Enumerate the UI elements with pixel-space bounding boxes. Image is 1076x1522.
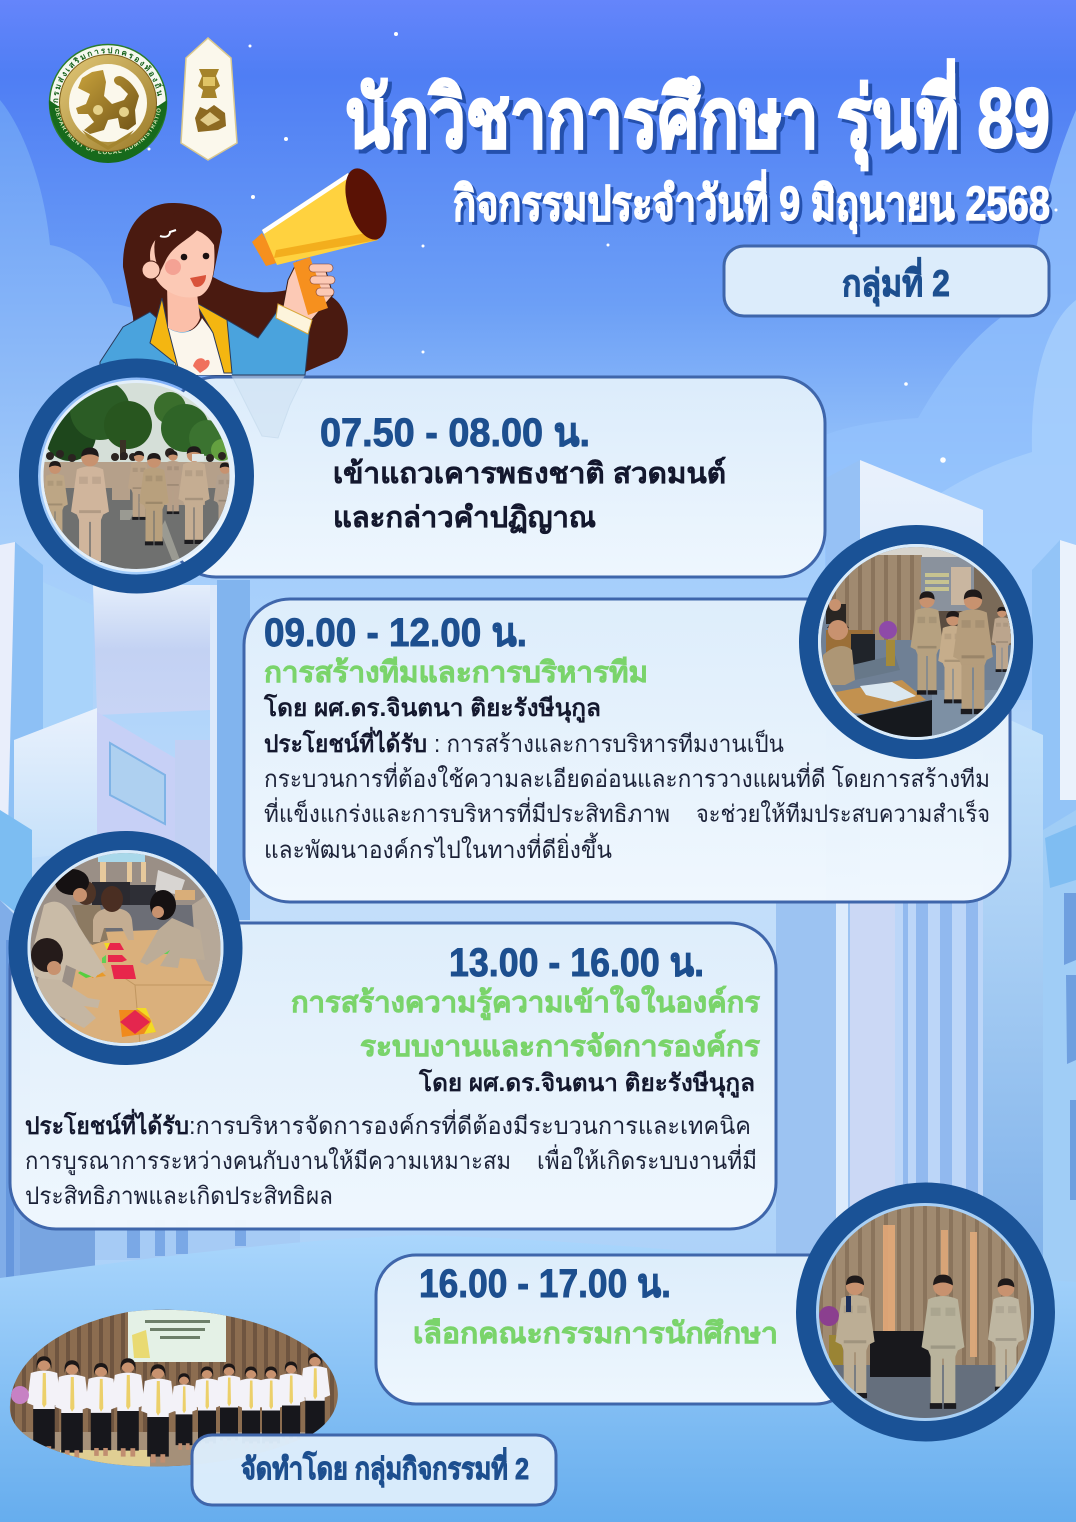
- speaker: โดย ผศ.ดร.จินตนา ติยะรังษีนุกูล: [418, 1068, 755, 1099]
- illustration: woman with megaphone: [100, 163, 395, 375]
- panel: 07.50 session: [170, 376, 825, 577]
- photo: group portrait: [10, 1310, 338, 1466]
- benefits text: จะช่วยให้ทีมประสบความสำเร็จ: [696, 799, 990, 828]
- activity text: และกล่าวคำปฏิญาณ: [333, 502, 596, 535]
- benefits text: [264, 726, 990, 864]
- left lower stripes: [20, 1220, 95, 1280]
- footer badge: made by activity group 2: [192, 1435, 556, 1505]
- time: 16.00 - 17.00: 16.00 - 17.00 น.: [419, 1262, 671, 1306]
- people: [192, 896, 220, 984]
- topic heading: เลือกคณะกรรมการนักศึกษา: [413, 1318, 778, 1350]
- footer badge: made by activity group 2: จัดทำโดย กลุ่มกิจกรรมที่ 2: [241, 1447, 529, 1488]
- panel: 16.00 session: [376, 1255, 856, 1404]
- benefits text: การบูรณาการระหว่างคนกับงานให้มีความเหมาะสม: [25, 1147, 511, 1176]
- benefits text: และพัฒนาองค์กรไปในทางที่ดียิ่งขึ้น: [264, 832, 612, 864]
- benefits text: :การบริหารจัดการองค์กรที่ดีต้องมีระบวนการและเทคนิค: [189, 1109, 751, 1140]
- header badge: group 2: [724, 246, 1049, 316]
- panel: 09.00 session: [244, 599, 1010, 902]
- topic heading: การสร้างทีมและการบริหารทีม: [264, 657, 648, 689]
- time: 09.00 - 12.00: 09.00 - 12.00 น.: [264, 611, 527, 655]
- topic heading: ระบบงานและการจัดการองค์กร: [360, 1029, 760, 1063]
- photo circle: student committee: [806, 1193, 1044, 1431]
- benefits text: : การสร้างและการบริหารทีมงานเป็น: [434, 729, 784, 758]
- photo circle: table activity: [18, 840, 233, 1056]
- left towers: [0, 542, 15, 830]
- time: 07.50 - 08.00: 07.50 - 08.00 น.: [320, 411, 590, 455]
- activity text: เข้าแถวเคารพธงชาติ สวดมนต์: [333, 456, 726, 490]
- icon: white emblem plaque: [181, 38, 237, 160]
- photo circle: flag ceremony: [28, 368, 244, 584]
- right towers: [860, 460, 983, 900]
- benefits text: [25, 1108, 757, 1210]
- benefits text: เพื่อให้เกิดระบบงานที่มี: [537, 1144, 757, 1175]
- photo circle: team building presentation: [808, 534, 1024, 750]
- benefits text: ประโยชน์ที่ได้รับ: [264, 726, 427, 758]
- topic heading: [291, 985, 760, 1063]
- topic heading: การสร้างความรู้ความเข้าใจในองค์กร: [291, 985, 760, 1020]
- benefits text: ที่แข็งแกร่งและการบริหารที่มีประสิทธิภาพ: [264, 797, 670, 828]
- benefits text: ประสิทธิภาพและเกิดประสิทธิผล: [25, 1183, 333, 1210]
- header badge: group 2: กลุ่มที่ 2: [842, 257, 950, 307]
- benefits text: กระบวนการที่ต้องใช้ความละเอียดอ่อนและการวางแผนที่ดี โดยการสร้างทีม: [264, 762, 990, 793]
- speaker: โดย ผศ.ดร.จินตนา ติยะรังษีนุกูล: [263, 693, 601, 724]
- benefits text: ประโยชน์ที่ได้รับ: [25, 1108, 189, 1140]
- center stripes: [776, 900, 850, 1260]
- panel: 13.00 session: [10, 923, 776, 1229]
- translucent jacket hem: [232, 376, 304, 438]
- ground: [0, 1235, 1076, 1522]
- icon: Department of Local Administration seal: [48, 44, 168, 163]
- icon: Department of Local Administration seal: กรมส่งเสริมการปกครองท้องถิ่น: [53, 47, 164, 103]
- time: 13.00 - 16.00: 13.00 - 16.00 น.: [449, 941, 704, 985]
- activity text: [333, 456, 726, 535]
